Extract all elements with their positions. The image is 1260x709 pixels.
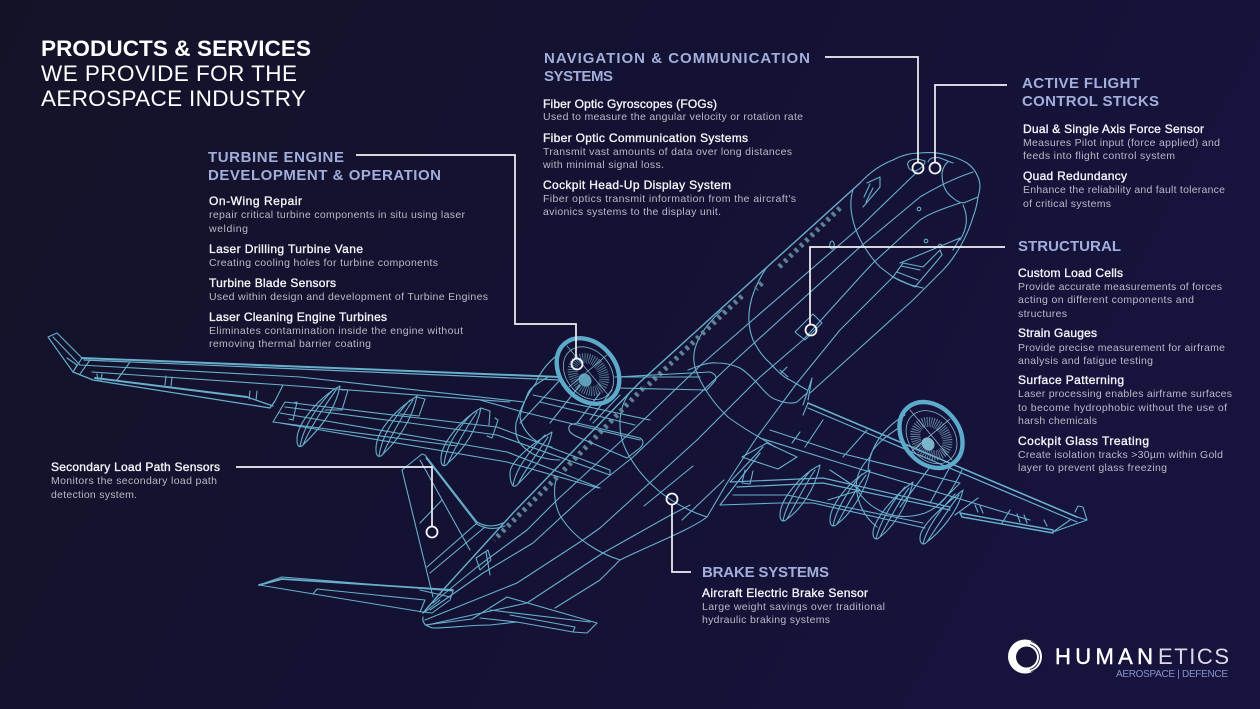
right engine <box>856 389 976 527</box>
item: electric brake sensor: hydraulic braking systems <box>702 614 830 626</box>
heading <box>544 50 810 85</box>
panel: secondary load path sensors: Monitors the secondary load path <box>51 475 217 487</box>
panel: navigation and communication systems <box>542 50 810 218</box>
marker: flight control sticks <box>930 162 940 174</box>
item: cockpit head-up display: avionics systems to the display unit. <box>543 206 721 218</box>
item: laser cleaning: Laser Cleaning Engine Turbines <box>209 310 387 324</box>
item: laser drilling: Creating cooling holes for turbine components <box>209 257 438 269</box>
marker: structural <box>806 324 816 336</box>
panel: active flight control sticks <box>1022 75 1225 210</box>
heading: STRUCTURAL <box>1018 238 1121 255</box>
item: fiber optic gyroscopes: Used to measure the angular velocity or rotation rate <box>543 111 803 123</box>
aircraft wireframe illustration <box>48 153 1087 633</box>
panel: secondary load path sensors <box>51 460 220 501</box>
heading: NAVIGATION & COMMUNICATION <box>544 50 810 67</box>
item: cockpit head-up display: Fiber optics transmit information from the aircraft's <box>543 193 796 205</box>
item: on-wing repair: repair critical turbine components in situ using laser <box>209 209 466 221</box>
item: on-wing repair: On-Wing Repair <box>209 194 302 208</box>
heading <box>208 149 441 184</box>
item: turbine blade sensors <box>209 276 488 303</box>
title: WE PROVIDE FOR THE <box>41 61 297 86</box>
item: surface patterning: harsh chemicals <box>1018 415 1097 427</box>
wordmark: HUMAN <box>1055 644 1153 669</box>
item: quad redundancy <box>1023 169 1225 210</box>
leader lines and markers <box>236 57 1007 572</box>
leader: brake systems <box>672 505 691 572</box>
item: turbine blade sensors: Used within design and development of Turbine Engines <box>209 291 488 303</box>
item: laser cleaning: removing thermal barrier coating <box>209 338 371 350</box>
vertical tail fin <box>402 454 505 597</box>
panel: secondary load path sensors: Secondary Load Path Sensors <box>51 460 220 474</box>
item: laser cleaning <box>209 310 463 350</box>
item: laser cleaning: Eliminates contamination inside the engine without <box>209 325 463 337</box>
title <box>41 36 311 111</box>
fan disc <box>886 389 976 481</box>
left engine <box>516 326 632 460</box>
item: cockpit head-up display: Cockpit Head-Up Display System <box>543 178 731 192</box>
wordmark <box>1055 644 1229 669</box>
cabin windows <box>494 208 840 540</box>
icon: ring mark <box>1008 640 1043 674</box>
item: electric brake sensor: Large weight savings over traditional <box>702 601 885 613</box>
logo: Humanetics <box>1008 640 1229 680</box>
item: custom load cells: structures <box>1018 308 1067 320</box>
item: laser drilling: Laser Drilling Turbine Vane <box>209 242 363 256</box>
cockpit and nose <box>942 162 978 203</box>
item: custom load cells <box>1018 266 1222 320</box>
item: cockpit glass treating: Cockpit Glass Treating <box>1018 434 1149 448</box>
leader: structural <box>810 247 1005 324</box>
fan disc <box>544 326 632 416</box>
item: surface patterning <box>1018 373 1232 427</box>
item: on-wing repair <box>208 194 466 235</box>
item: strain gauges: Strain Gauges <box>1018 326 1097 340</box>
tagline: AEROSPACE | DEFENCE <box>1116 669 1228 680</box>
item: laser drilling <box>209 242 438 269</box>
item: force sensor: feeds into flight control system <box>1023 150 1175 162</box>
item: custom load cells: Provide accurate measurements of forces <box>1018 281 1222 293</box>
item: on-wing repair: welding <box>208 223 248 235</box>
heading: SYSTEMS <box>544 68 613 85</box>
item: electric brake sensor: Aircraft Electric Brake Sensor <box>702 586 868 600</box>
heading: TURBINE ENGINE <box>208 149 344 166</box>
leader: turbine engine <box>356 155 576 358</box>
item: custom load cells: acting on different components and <box>1018 294 1194 306</box>
item: cockpit head-up display <box>543 178 796 218</box>
item: fiber optic communication: Transmit vast amounts of data over long distances <box>543 146 792 158</box>
fuselage <box>423 153 980 625</box>
item: strain gauges: analysis and fatigue testing <box>1018 355 1153 367</box>
item: fiber optic gyroscopes <box>543 97 803 123</box>
marker: secondary load path <box>426 526 438 538</box>
heading: CONTROL STICKS <box>1022 93 1159 110</box>
horizontal stabilisers <box>259 577 597 633</box>
panel: structural <box>1018 238 1232 474</box>
left wing <box>48 333 716 488</box>
item: force sensor: Measures Pilot input (force applied) and <box>1023 137 1220 149</box>
item: custom load cells: Custom Load Cells <box>1018 266 1123 280</box>
heading: BRAKE SYSTEMS <box>702 564 829 581</box>
item: strain gauges: Provide precise measurement for airframe <box>1018 342 1225 354</box>
nacelle <box>516 353 560 460</box>
panel: brake systems <box>702 564 885 626</box>
leader: flight control sticks <box>935 85 1007 162</box>
heading: ACTIVE FLIGHT <box>1022 75 1140 92</box>
heading: DEVELOPMENT & OPERATION <box>208 167 441 184</box>
item: cockpit glass treating: Create isolation tracks >30µm within Gold <box>1018 449 1223 461</box>
item: quad redundancy: Quad Redundancy <box>1023 169 1127 183</box>
title: PRODUCTS & SERVICES <box>41 36 311 61</box>
item: turbine blade sensors: Turbine Blade Sensors <box>209 276 336 290</box>
item: electric brake sensor <box>702 586 885 626</box>
item: fiber optic communication: with minimal signal loss. <box>542 159 664 171</box>
marker: navigation <box>912 162 924 174</box>
leader: secondary load path <box>236 467 432 526</box>
item: fiber optic communication: Fiber Optic Communication Systems <box>543 131 748 145</box>
item: surface patterning: Surface Patterning <box>1018 373 1124 387</box>
nacelle <box>856 415 962 527</box>
item: fiber optic gyroscopes: Fiber Optic Gyroscopes (FOGs) <box>543 97 717 111</box>
item: cockpit glass treating <box>1018 434 1223 474</box>
item: force sensor: Dual & Single Axis Force Sensor <box>1023 122 1204 136</box>
title: AEROSPACE INDUSTRY <box>41 86 306 111</box>
fuselage section arcs <box>851 190 923 288</box>
panel: turbine engine development and operation <box>208 149 488 350</box>
item: surface patterning: Laser processing enables airframe surfaces <box>1018 388 1232 400</box>
wordmark: ETICS <box>1158 644 1229 669</box>
panel: secondary load path sensors: detection system. <box>51 489 137 501</box>
marker: brake systems <box>666 494 678 504</box>
item: force sensor <box>1023 122 1220 162</box>
right wing <box>720 403 1087 544</box>
item: fiber optic communication <box>542 131 792 171</box>
item: surface patterning: to become hydrophobic without the use of <box>1018 402 1227 414</box>
item: quad redundancy: of critical systems <box>1023 198 1111 210</box>
heading <box>1022 75 1159 110</box>
leader: navigation <box>825 57 918 162</box>
item: quad redundancy: Enhance the reliability and fault tolerance <box>1023 184 1225 196</box>
item: cockpit glass treating: layer to prevent glass freezing <box>1018 462 1167 474</box>
marker: turbine engine <box>572 358 582 370</box>
item: strain gauges <box>1018 326 1225 367</box>
